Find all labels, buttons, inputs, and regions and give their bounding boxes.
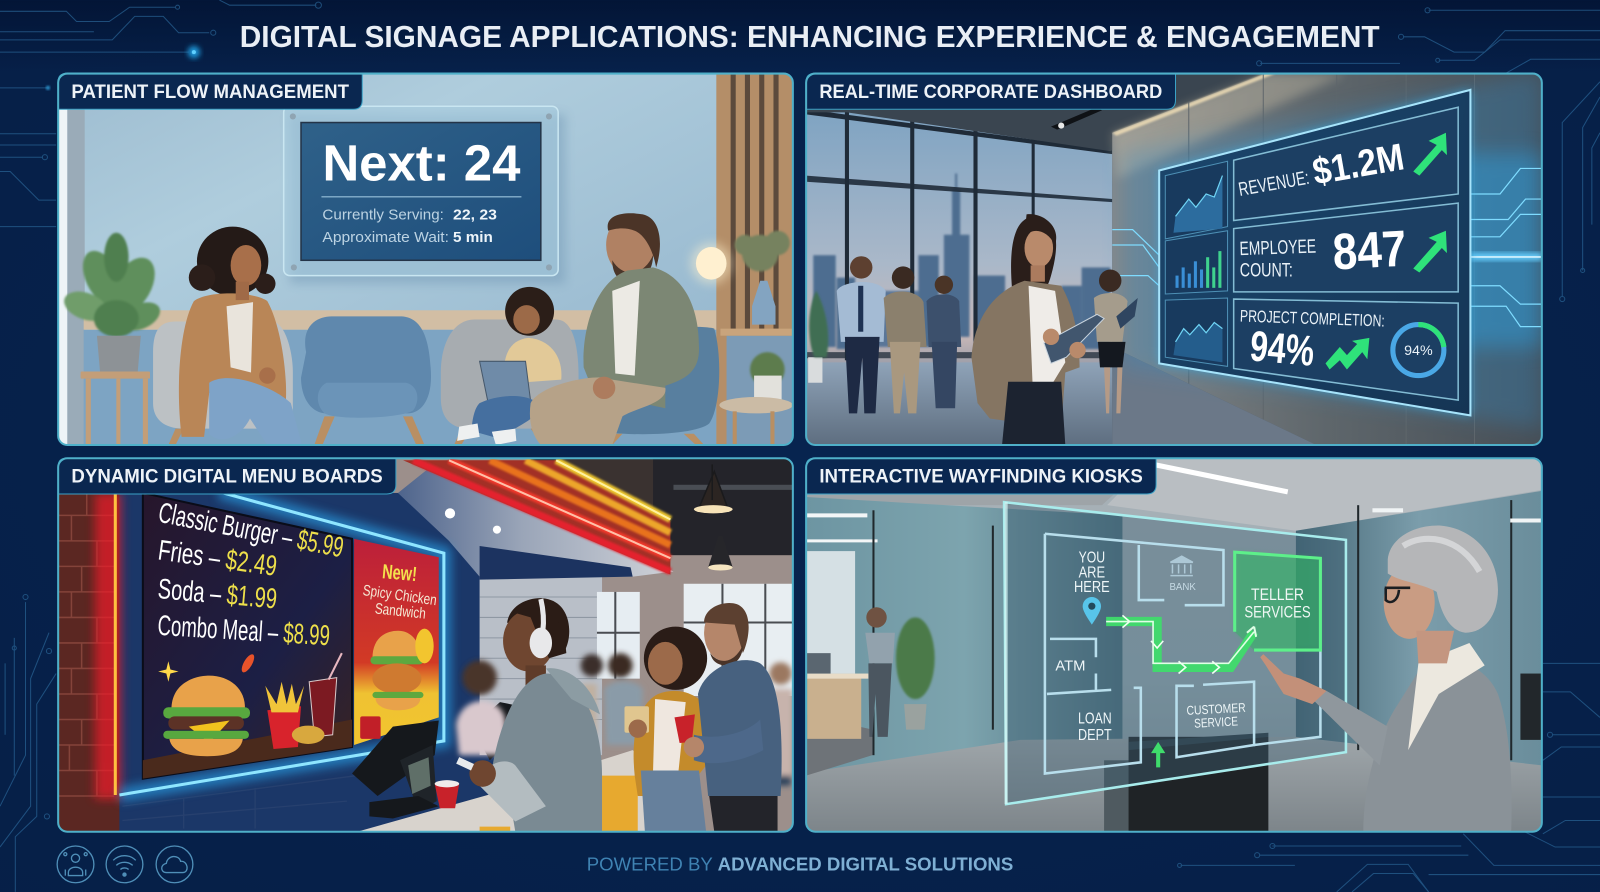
office worker and plant (806, 607, 935, 739)
revenue chart (1165, 161, 1228, 239)
window frames (806, 109, 1112, 360)
ceiling with light (806, 74, 1276, 151)
counter (357, 750, 653, 832)
city skyline (813, 174, 1110, 349)
plant and stool (60, 233, 164, 445)
neon screen frame (115, 492, 444, 795)
pendant lamps (694, 464, 733, 570)
restaurant scene (58, 458, 793, 832)
label tab: REAL-TIME CORPORATE DASHBOARD (819, 81, 1162, 103)
panel: patient flow management (58, 74, 793, 445)
teller services room (1235, 552, 1320, 650)
queue display sign: Approximate Wait: (322, 230, 449, 246)
label tab: DYNAMIC DIGITAL MENU BOARDS (71, 466, 383, 488)
label tab (806, 74, 1176, 109)
customer with headphones (456, 598, 602, 832)
woman with drink (624, 627, 710, 832)
menu board: Combo Meal – $8.99 (157, 610, 331, 652)
panel: corporate dashboard (806, 72, 1542, 445)
man in olive shirt (530, 213, 699, 445)
promo panel: Sandwich (374, 600, 427, 623)
revenue cell (1234, 107, 1458, 220)
fries and drink (158, 652, 342, 749)
panel: digital menu boards (58, 458, 793, 832)
brick wall (58, 493, 357, 832)
kiosk stand (1104, 733, 1268, 832)
promo panel (354, 539, 439, 745)
vase and small plant (719, 231, 793, 445)
title: DIGITAL SIGNAGE APPLICATIONS: ENHANCING EXPERIENCE & ENGAGEMENT (240, 21, 1380, 54)
background colleagues (808, 256, 1138, 413)
queue display sign: 22, 23 (453, 207, 497, 223)
burger illustration (143, 676, 352, 779)
queue display sign: Currently Serving: (322, 207, 444, 223)
concrete wall (1112, 74, 1542, 445)
queue display sign: Next: 24 (322, 135, 521, 192)
queue display sign (284, 106, 565, 284)
holographic floor plan (1004, 502, 1346, 804)
man in navy sweater (674, 603, 782, 832)
employee cell: EMPLOYEE (1239, 236, 1317, 260)
footer text: POWERED BY ADVANCED DIGITAL SOLUTIONS (587, 853, 1013, 874)
child with tablet (457, 287, 561, 445)
room labels (1055, 658, 1246, 744)
bright windows (597, 584, 793, 696)
waiting chairs (153, 316, 719, 445)
label tab: INTERACTIVE WAYFINDING KIOSKS (819, 466, 1143, 488)
promo panel: Spicy Chicken (362, 582, 438, 609)
room labels: SERVICE (1194, 713, 1238, 731)
revenue cell: $1.2M (1309, 135, 1407, 193)
woman with tablet (971, 214, 1104, 445)
project completion cell: PROJECT COMPLETION: (1240, 307, 1385, 331)
menu board: Fries – $2.49 (156, 535, 279, 583)
dashboard display (1159, 90, 1470, 415)
employee chart (1165, 231, 1228, 294)
ceiling neon strips (403, 460, 670, 575)
bank icon and label (1169, 556, 1196, 593)
menu board: Classic Burger – $5.99 (156, 497, 346, 564)
bank icon and label: BANK (1169, 582, 1196, 593)
office scene (806, 458, 1542, 832)
room labels: DEPT (1078, 727, 1112, 744)
teller services room: TELLER (1251, 585, 1304, 604)
teller services room: SERVICES (1244, 602, 1311, 621)
project completion cell: 94% (1404, 343, 1433, 359)
side white brick wall (480, 577, 602, 755)
woman pointing at kiosk (1260, 526, 1512, 832)
red cup (435, 780, 459, 808)
completion chart (1165, 298, 1228, 366)
glowing wall lamp (691, 243, 732, 284)
employee cell (1234, 203, 1458, 292)
panel: wayfinding kiosks (806, 458, 1542, 832)
left glass wall (806, 497, 1542, 832)
label tab (58, 74, 362, 109)
wood slat wall (716, 74, 793, 445)
glowing circuits right of dashboard (1112, 168, 1542, 327)
waiting room scene (58, 74, 793, 445)
blurred customers (456, 653, 793, 786)
you are here label (1074, 549, 1110, 625)
room labels: CUSTOMER (1186, 700, 1246, 718)
glowing circuit nodes (46, 46, 200, 90)
ceiling soffit (398, 460, 673, 580)
revenue cell: REVENUE: (1237, 167, 1311, 201)
woman in cardigan (179, 227, 302, 445)
room labels: ATM (1055, 658, 1085, 674)
room walls (1045, 534, 1320, 774)
label tab (58, 458, 396, 494)
you are here label: YOU (1079, 549, 1105, 566)
POS terminal (352, 702, 520, 818)
footer icon: wifi (106, 846, 143, 883)
label tab (806, 458, 1156, 494)
green route (1106, 615, 1256, 674)
employee cell: COUNT: (1240, 260, 1293, 282)
room labels: LOAN (1078, 711, 1112, 728)
entrance arrow (1151, 742, 1165, 767)
right glass wall (1296, 491, 1542, 765)
lobby scene (806, 72, 1542, 445)
promo panel: New! (381, 561, 418, 586)
employee cell: 847 (1331, 220, 1408, 280)
blue wall glow around dashboard (1122, 72, 1542, 429)
you are here label: ARE (1079, 565, 1105, 582)
label tab: PATIENT FLOW MANAGEMENT (71, 81, 349, 103)
you are here label: HERE (1074, 579, 1110, 596)
menu board (143, 493, 352, 779)
project completion cell (1234, 299, 1458, 400)
menu board: Soda – $1.99 (157, 573, 278, 615)
footer icon: cloud (156, 846, 193, 883)
project completion cell: 94% (1248, 322, 1316, 376)
footer icon: network person (57, 846, 94, 883)
queue display sign: 5 min (453, 230, 493, 246)
